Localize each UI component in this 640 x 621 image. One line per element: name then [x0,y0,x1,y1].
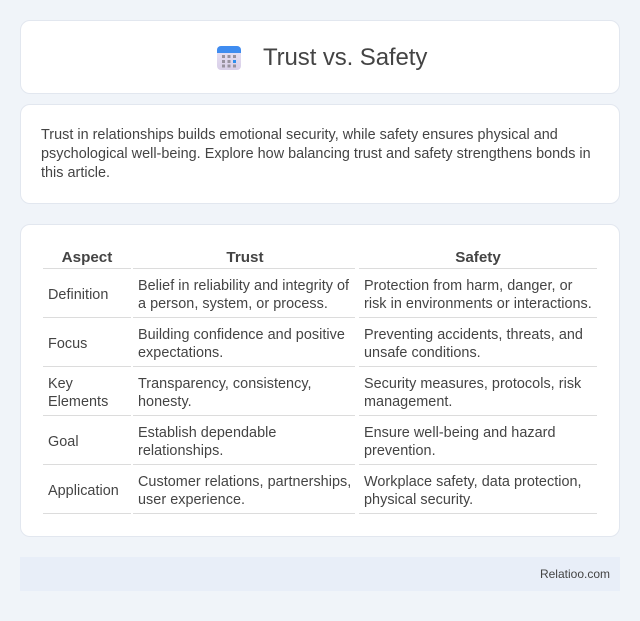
table row: Focus: expectations. [138,345,223,361]
table row: Goal: Establish dependable [138,425,276,441]
intro text [41,127,591,181]
table headers: Aspect [62,249,112,266]
table row: Key Elements: honesty. [138,394,192,410]
table row: Focus: Building confidence and positive [138,327,345,343]
title: Trust vs. Safety [263,44,427,71]
table row: Definition: risk in environments or interactions. [364,296,592,312]
table row: Goal [43,425,597,465]
intro text: Trust in relationships builds emotional security, while safety ensures physical and [41,127,558,143]
table row: Definition: Definition [48,287,108,303]
table row: Key Elements: Security measures, protocols, risk [364,376,581,392]
panel: title card [20,20,620,94]
table row: Definition: Belief in reliability and integrity of [138,278,349,294]
table row: Key Elements: Elements [48,394,108,410]
icon: calendar [217,46,241,70]
table row: Focus: Focus [48,336,87,352]
table row: Key Elements [43,376,597,416]
table row: Application: physical security. [364,492,473,508]
table row: Focus [43,327,597,367]
table row: Goal: prevention. [364,443,436,459]
table row: Key Elements: Key [48,376,73,392]
table headers: Safety [455,249,501,266]
table row: Application [43,474,597,514]
table row: Key Elements: Transparency, consistency, [138,376,312,392]
table row: Goal: relationships. [138,443,223,459]
table row: Application: Customer relations, partnerships, [138,474,351,490]
table headers: Trust [226,249,264,266]
table row: Definition [43,278,597,318]
table row: Application: Application [48,483,119,499]
intro text: psychological well-being. Explore how balancing trust and safety strengthens bonds in [41,146,591,162]
table row: Goal: Ensure well-being and hazard [364,425,556,441]
panel: comparison table [20,224,620,537]
table row: Definition: Protection from harm, danger, or [364,278,572,294]
footer credit: Relatioo.com [540,567,610,581]
table row: Application: Workplace safety, data protection, [364,474,582,490]
table row: Definition: a person, system, or process. [138,296,328,312]
table row: Focus: unsafe conditions. [364,345,481,361]
panel: introduction [20,104,620,204]
footer bar [20,557,620,591]
intro text: this article. [41,165,110,181]
table row: Key Elements: management. [364,394,452,410]
table headers [43,249,597,269]
table row: Focus: Preventing accidents, threats, and [364,327,583,343]
table row: Application: user experience. [138,492,245,508]
table row: Goal: Goal [48,434,79,450]
